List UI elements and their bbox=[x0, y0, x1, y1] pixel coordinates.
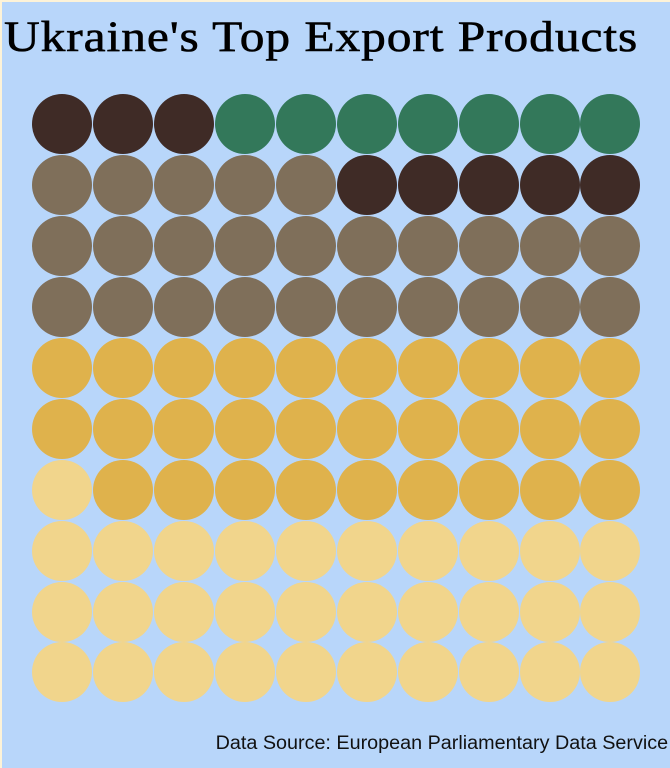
rows 8-10 light bbox=[32, 521, 640, 702]
rows 3-4 taupe bbox=[32, 216, 640, 337]
rows 5-7 gold bbox=[32, 338, 640, 520]
row 2 bbox=[32, 155, 640, 215]
source note: Data Source: European Parliamentary Data Service bbox=[215, 733, 668, 754]
row 1 bbox=[32, 94, 640, 154]
title: Ukraine's Top Export Products bbox=[4, 14, 638, 61]
